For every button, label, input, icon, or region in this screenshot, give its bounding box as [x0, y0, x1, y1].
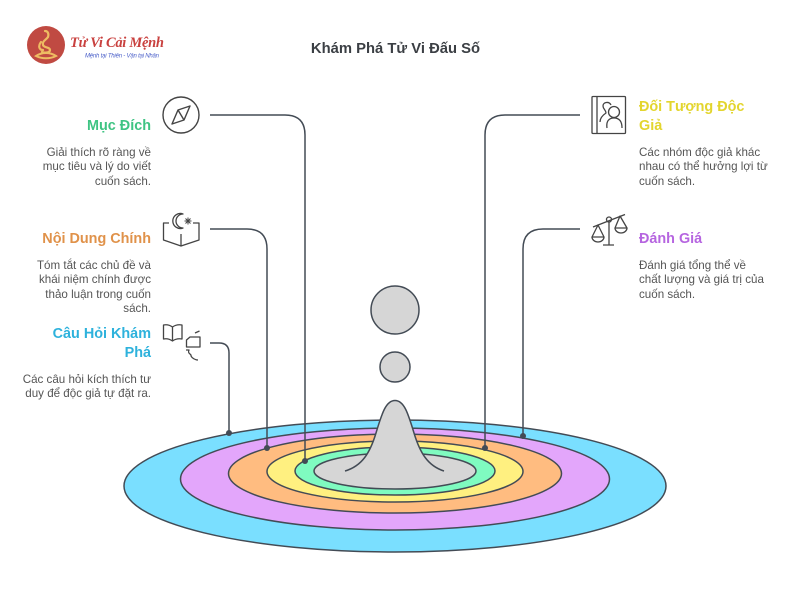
- ring: grey centre: [314, 453, 476, 489]
- text block: Nội Dung Chính: Nội Dung Chính: [42, 231, 151, 247]
- text block: Nội Dung Chính: khái niệm chính được: [39, 273, 151, 286]
- text block: Câu Hỏi Khám Phá: [23, 326, 152, 400]
- text block: Mục Đích: mục tiêu và lý do viết: [43, 160, 151, 173]
- connector: Đối Tượng Độc Giả: [482, 115, 580, 451]
- text block: Đối Tượng Độc Giả: Đối Tượng Độc: [639, 99, 744, 115]
- text block: Câu Hỏi Khám Phá: Câu Hỏi Khám: [53, 326, 151, 342]
- text block: Mục Đích: Giải thích rõ ràng về: [47, 146, 151, 158]
- text block: Đánh Giá: Đánh Giá: [639, 231, 702, 247]
- small floating circle: [380, 352, 410, 382]
- text block: Nội Dung Chính: [37, 231, 151, 315]
- connector: Đánh Giá: [520, 229, 580, 439]
- connector: Mục Đích: [210, 115, 308, 464]
- logo emblem: [27, 26, 65, 64]
- ring: purple: [180, 428, 610, 530]
- text block: Nội Dung Chính: sách.: [123, 302, 151, 315]
- peak: [345, 400, 444, 471]
- text block: Đối Tượng Độc Giả: [639, 99, 768, 188]
- logo tagline: Mệnh tại Thiên - Vận tại Nhân: [85, 54, 160, 60]
- connector: Nội Dung Chính: [210, 229, 270, 451]
- peak outline: [345, 400, 444, 471]
- text block: Đánh Giá: [639, 231, 764, 300]
- ring: blue: [124, 420, 666, 552]
- text block: Câu Hỏi Khám Phá: Phá: [125, 345, 151, 361]
- text block: Đối Tượng Độc Giả: cuốn sách.: [639, 174, 695, 188]
- text block: Mục Đích: Mục Đích: [87, 118, 151, 134]
- text block: Câu Hỏi Khám Phá: Các câu hỏi kích thích tư: [23, 372, 151, 386]
- icon: reader book: [592, 96, 626, 134]
- icon: compass: [163, 97, 199, 133]
- ring: green: [295, 447, 495, 495]
- logo: [27, 26, 164, 64]
- large floating circle: [371, 286, 419, 334]
- icon: open book with moon and star: [164, 214, 199, 246]
- text block: Đối Tượng Độc Giả: Giả: [639, 118, 662, 134]
- text block: Đánh Giá: Đánh giá tổng thể về: [639, 258, 746, 272]
- connector: Câu Hỏi Khám Phá: [210, 343, 232, 436]
- icon: scales: [592, 214, 627, 245]
- ring: orange: [228, 434, 562, 513]
- diagram: concentric rings: [124, 420, 666, 552]
- logo name: Tử Vi Cải Mệnh: [70, 35, 164, 51]
- text block: Đánh Giá: chất lượng và giá trị của: [639, 273, 764, 286]
- text block: Mục Đích: cuốn sách.: [95, 174, 151, 188]
- text block: Đối Tượng Độc Giả: nhau có thể hưởng lợi từ: [639, 160, 768, 173]
- ring: yellow: [267, 441, 523, 502]
- text block: Đánh Giá: cuốn sách.: [639, 288, 695, 300]
- title: Khám Phá Tử Vi Đấu Số: [311, 41, 480, 57]
- text block: Nội Dung Chính: thảo luận trong cuốn: [45, 288, 151, 300]
- text block: Mục Đích: [43, 118, 151, 188]
- icon: book and speech: [164, 325, 200, 360]
- text block: Đối Tượng Độc Giả: Các nhóm độc giả khác: [639, 146, 760, 158]
- text block: Nội Dung Chính: Tóm tắt các chủ đề và: [37, 258, 151, 272]
- text block: Câu Hỏi Khám Phá: duy để độc giả tự đặt ra.: [25, 387, 151, 400]
